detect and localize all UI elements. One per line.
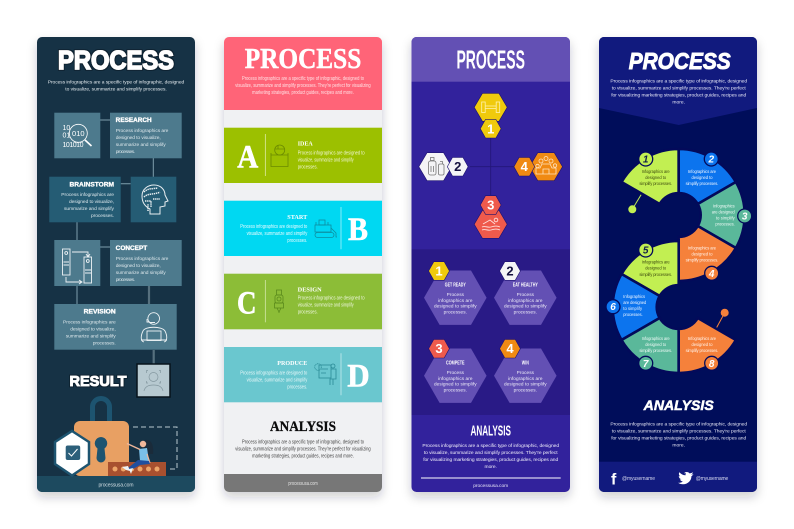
step 4: simplify processes. [686, 257, 718, 262]
connector lines [77, 120, 154, 364]
step card: compete: COMPETE [446, 360, 465, 366]
step: research: Process infographics are [116, 128, 169, 134]
social: twitter [678, 472, 729, 484]
band B: start: START [287, 215, 307, 221]
step 7: 7 [643, 359, 649, 370]
intro text: to visualize, summarize and simplify processes. They're perfect [612, 85, 746, 91]
step 2: Infographics are [688, 169, 717, 174]
cross connector [470, 137, 515, 195]
step 3: Infographics [713, 203, 735, 208]
step card: win: processes. [514, 387, 537, 392]
icon: worker [271, 145, 288, 166]
social: facebook: f [611, 472, 617, 488]
band A: idea: A [237, 140, 258, 176]
band C: design: Process infographics are designed to [298, 296, 365, 302]
step 7: designed to [645, 342, 667, 347]
step card: get ready [424, 262, 487, 325]
step: concept: Process infographics are [116, 256, 169, 262]
step 5: simplify processes. [639, 272, 672, 277]
step 1: designed to [645, 175, 667, 180]
step 3 [712, 203, 752, 226]
step card: win: designed to simplify [504, 382, 547, 386]
social: facebook [611, 472, 655, 488]
social: facebook: @myusername [622, 476, 655, 482]
hexagon group 1: dumbbell: 1 [487, 121, 494, 136]
step: revision: designed to visualize, [70, 326, 116, 332]
step card: compete [424, 339, 487, 403]
band A: idea: IDEA [298, 142, 313, 148]
step: revision: Process infographics are [63, 320, 116, 326]
analysis text [422, 443, 559, 470]
hexagon group 1: dumbbell [474, 93, 507, 138]
intro text [235, 76, 371, 96]
panel: navy process card with ring chart [599, 37, 757, 493]
band B: start: Process infographics are designed to [240, 224, 307, 230]
step: research: RESEARCH [116, 118, 152, 124]
step: concept: summarize and simplify [116, 270, 166, 276]
analysis text: more. [672, 443, 685, 449]
step card: compete: designed to simplify [434, 382, 477, 386]
step 4 [686, 245, 719, 280]
step 8: Infographics are [688, 336, 717, 341]
band C: design: visualize, summarize and simplify [298, 303, 354, 309]
step card: eat healthy: 2 [506, 264, 514, 278]
step: research: processes. [116, 149, 135, 155]
step: research: designed to visualize, [116, 135, 161, 141]
footer url: processusa.com [288, 481, 318, 487]
icon box: brain head [131, 177, 176, 222]
hexagon group 4: crowd: 4 [521, 159, 529, 174]
step 2 [686, 152, 718, 186]
icon box: research: 01 [62, 132, 70, 140]
analysis text: to visualize, summarize and simplify processes. They're perfect [424, 450, 558, 456]
title: PROCESS [58, 45, 174, 75]
footer band [37, 476, 195, 492]
step: revision: REVISION [84, 310, 116, 316]
lollipop marker 1 [628, 193, 642, 213]
band D: produce: D [347, 359, 370, 395]
step 5: Infographics are [642, 260, 670, 265]
step: brainstorm: summarize and simplify [64, 206, 115, 212]
step card: win [494, 339, 557, 403]
step 2: simplify processes. [686, 181, 718, 186]
hexagon group 2: bottles [419, 153, 468, 181]
step: brainstorm: designed to visualize, [69, 199, 114, 205]
intro text: to visualize, summarize and simplify processes. [65, 86, 167, 92]
intro text [610, 78, 747, 105]
step 6: Infographics [623, 294, 645, 299]
step 3: to simplify [716, 215, 736, 220]
analysis text: to visualize, summarize and simplify processes. They're perfect [612, 429, 746, 435]
band C: design: processes. [298, 310, 318, 316]
step 1: 1 [643, 154, 649, 166]
step card: eat healthy: infographics are [508, 298, 543, 303]
hexagon group 3: swimmer: 3 [487, 198, 494, 212]
ring chart: eight-step figure S [606, 149, 752, 373]
step 8: 8 [709, 359, 715, 370]
step 8 [686, 336, 719, 370]
lollipop marker 8 [716, 309, 729, 329]
band C: design [224, 274, 382, 329]
band B: start: processes. [287, 238, 307, 244]
analysis heading: ANALYSIS [270, 419, 336, 435]
analysis text: more. [485, 464, 497, 470]
step 4: 4 [708, 269, 715, 280]
step card: get ready: processes. [444, 309, 467, 314]
step 5: designed to [645, 266, 667, 271]
step card: get ready: Process [447, 292, 465, 297]
step 8: simplify processes. [686, 348, 718, 353]
step 5: 5 [643, 246, 649, 256]
panel: dark teal process card [37, 37, 195, 492]
step 6: 6 [610, 302, 616, 313]
band D: produce [224, 347, 382, 402]
illustration: padlock, shield and person [55, 398, 177, 476]
step card: get ready: GET READY [445, 282, 466, 288]
intro text: Process infographics are a specific type of infographic, designed to [242, 76, 364, 82]
intro text: for visualizing marketing strategies, product guides, recipes and [611, 92, 746, 98]
icon box: research: 101010 [62, 142, 84, 149]
band A: idea: visualize, summarize and simplify [298, 158, 354, 164]
icon: headset operator [141, 313, 167, 342]
band A: idea: Process infographics are designed to [298, 151, 365, 157]
section backgrounds [412, 37, 570, 415]
title: PROCESS [456, 44, 525, 74]
analysis text: Process infographics are a specific type of infographic, designed [610, 422, 747, 428]
band C: design: DESIGN [298, 288, 322, 294]
step 6 [606, 294, 647, 317]
icon box: research: 10 [62, 125, 70, 132]
step: revision [54, 304, 177, 350]
hexagon group 4: crowd [514, 153, 562, 181]
intro text: visualize, summarize and simplify processes. They're perfect for visualizing [235, 83, 371, 89]
step: research [110, 113, 182, 158]
step card: compete: processes. [444, 387, 467, 392]
panel: purple process card with hexagons [412, 37, 570, 492]
step: concept [110, 240, 182, 286]
analysis text: for visualizing marketing strategies, product guides, recipes and [423, 457, 558, 463]
step: brainstorm: BRAINSTORM [70, 182, 114, 188]
band D: produce: processes. [287, 384, 307, 390]
analysis text: Process infographics are a specific type of infographic, designed to [242, 440, 364, 446]
step 7: Infographics are [642, 336, 670, 341]
step card: get ready: designed to simplify [434, 304, 477, 309]
band B: start: B [348, 212, 368, 248]
step 6: to simplify [623, 306, 643, 311]
step card: eat healthy [494, 262, 557, 325]
step card: win: 4 [506, 341, 514, 356]
band C: design: C [237, 286, 256, 322]
step: revision: processes. [93, 340, 116, 346]
step 3: processes. [715, 221, 735, 226]
step 2: designed to [692, 175, 713, 180]
intro text: Process infographics are a specific type of infographic, designed [48, 79, 185, 85]
band B: start [224, 201, 382, 256]
step card: eat healthy: EAT HEALTHY [513, 282, 538, 288]
footer url: processusa.com [473, 483, 508, 489]
icon: robot arm [274, 290, 284, 313]
step card: compete: Process [447, 370, 465, 375]
icon box: research [54, 113, 100, 158]
hexagon group 3: swimmer [474, 196, 507, 238]
intro text: marketing strategies, product guides, recipes and more. [252, 90, 354, 96]
title: PROCESS [245, 43, 361, 75]
title: PROCESS [629, 48, 731, 74]
step card: compete: 3 [435, 341, 443, 356]
step 7: simplify processes. [639, 348, 672, 353]
analysis heading: ANALYSIS [643, 397, 714, 413]
step 1: simplify processes. [639, 181, 672, 186]
upper ring segments [622, 149, 745, 281]
header band [224, 37, 382, 492]
step card: eat healthy: Process [517, 292, 535, 297]
step card: win: Process [517, 370, 535, 375]
footer band: processusa.com [98, 483, 134, 489]
intro text: more. [672, 99, 685, 105]
step: brainstorm [49, 177, 121, 222]
step: brainstorm: processes. [91, 213, 114, 219]
step 1 [639, 152, 672, 186]
step: research: summarize and simplify [116, 142, 166, 148]
header and footer bands [599, 37, 757, 493]
step 4: designed to [692, 251, 713, 256]
step 2: 2 [708, 154, 715, 166]
analysis text: marketing strategies, product guides, recipes and more. [252, 454, 354, 460]
band D: produce: Process infographics are designed to [240, 370, 307, 376]
icon: bulldozer [315, 220, 337, 238]
analysis text [235, 440, 371, 460]
step card: get ready: infographics are [438, 298, 473, 303]
step 1: Infographics are [642, 169, 670, 174]
step 8: designed to [692, 342, 713, 347]
step card: win: WIN [522, 360, 529, 366]
band D: produce: PRODUCE [277, 361, 307, 367]
step card: eat healthy: designed to simplify [504, 304, 547, 309]
step: revision: summarize and simplify [66, 334, 116, 340]
step 7 [639, 336, 672, 370]
step 6: processes. [623, 312, 643, 317]
icon box: concept [54, 240, 100, 286]
step card: get ready: 1 [435, 264, 443, 278]
intro text [48, 79, 185, 92]
step card: win: infographics are [508, 376, 543, 381]
step 3: are designed [712, 209, 735, 214]
result icon box [137, 364, 170, 397]
band B: start: visualize, summarize and simplify [247, 231, 308, 237]
analysis heading: ANALYSIS [470, 422, 511, 440]
band A: idea [224, 128, 382, 183]
icon box: research: 010 [72, 129, 85, 138]
analysis text: Process infographics are a specific type of infographic, designed [422, 443, 559, 449]
band A: idea: processes. [298, 165, 318, 171]
step card: eat healthy: processes. [514, 309, 537, 314]
icon: presenter [315, 364, 336, 385]
step: concept: designed to visualize, [116, 263, 161, 269]
step 4: Infographics are [688, 245, 717, 250]
step 6: are designed [623, 300, 647, 305]
step card: compete: infographics are [438, 376, 473, 381]
band D: produce: visualize, summarize and simplify [247, 378, 308, 384]
analysis text: visualize, summarize and simplify processes. They're perfect for visualizing [235, 447, 371, 453]
step: brainstorm: Process infographics are [61, 192, 114, 198]
step 5 [639, 243, 672, 277]
step: concept: processes. [116, 277, 135, 283]
step: concept: CONCEPT [116, 246, 148, 252]
social: twitter: @myusername [696, 476, 729, 482]
result heading: RESULT [70, 374, 127, 390]
panel: light process card with coloured bands [224, 37, 382, 492]
intro text: Process infographics are a specific type of infographic, designed [610, 78, 747, 84]
analysis text: for visualizing marketing strategies, product guides, recipes and [611, 436, 746, 442]
hexagon group 2: bottles: 2 [454, 159, 461, 174]
lower ring segments [613, 241, 736, 373]
step 3: 3 [742, 212, 748, 222]
analysis text [610, 422, 747, 449]
